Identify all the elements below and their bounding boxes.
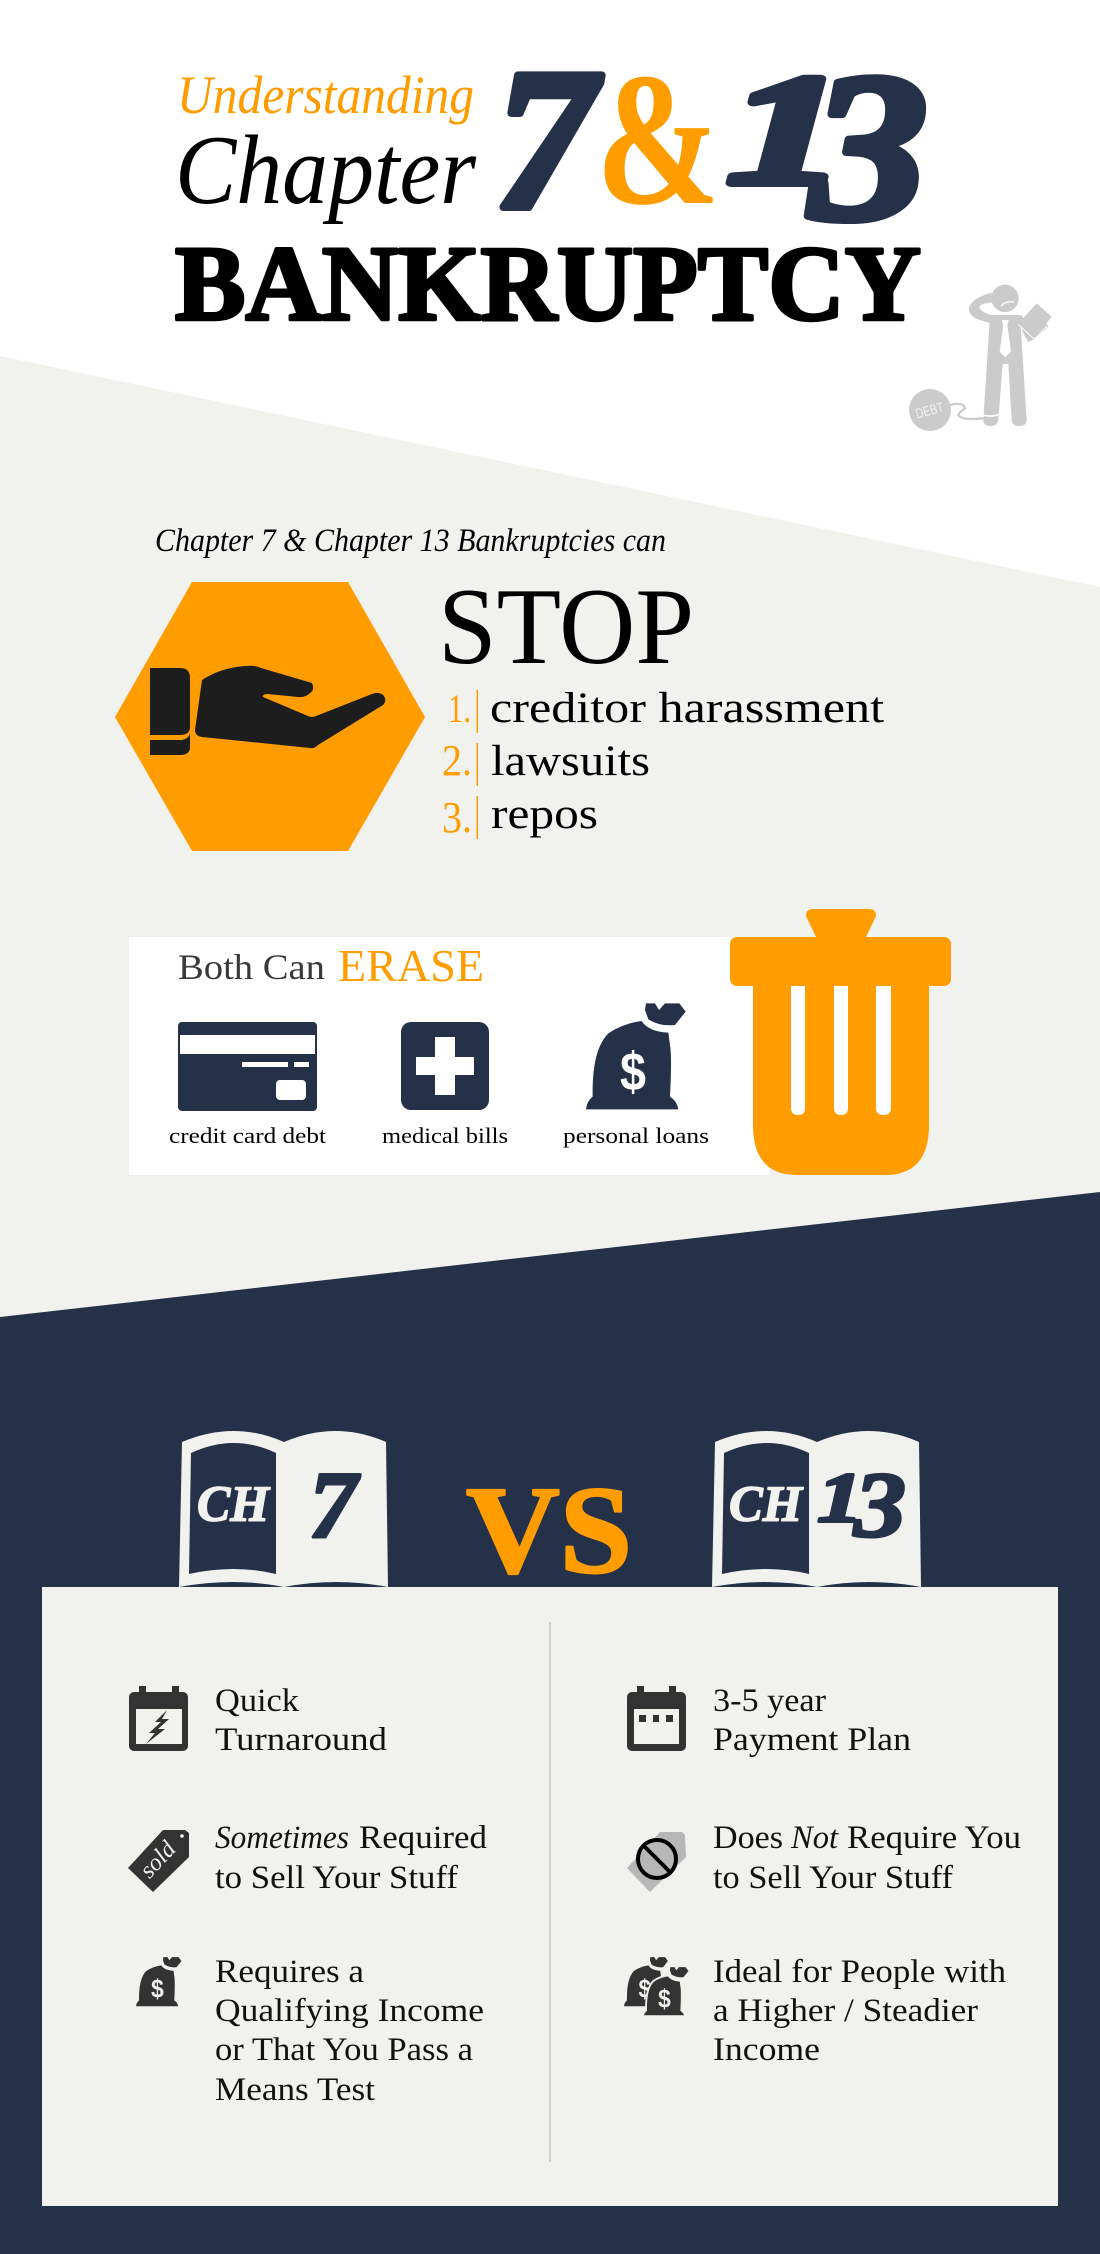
label: credit card debt: credit card debt	[169, 1123, 326, 1148]
text: requires qualifying income: Qualifying Income	[215, 1993, 484, 2029]
heading: both can erase	[178, 941, 484, 991]
text: 3-5 year payment plan: 3-5 year	[713, 1683, 826, 1719]
text: requires qualifying income	[215, 1954, 484, 2108]
text: does not require selling	[713, 1820, 1021, 1896]
text: 3-5 year payment plan	[713, 1683, 911, 1758]
title: 7	[495, 29, 602, 251]
icon: man chained to debt ball: DEBT	[914, 399, 946, 422]
text: ideal for higher income: a Higher / Steadier	[713, 1993, 978, 2029]
icon: sold tag	[128, 1830, 189, 1892]
icon: chapter 13 book	[712, 1431, 921, 1587]
icon: two money bags: $	[639, 1975, 651, 2003]
list: what bankruptcy stops: creditor harassment	[490, 685, 884, 732]
list: what bankruptcy stops: repos	[491, 791, 598, 838]
versus heading: VS	[466, 1462, 632, 1600]
title: 1	[726, 43, 847, 218]
text: requires qualifying income: Requires a	[215, 1954, 364, 1990]
icon: chapter 7 book: CH	[197, 1477, 270, 1533]
title: Chapter	[175, 116, 476, 225]
list: what bankruptcy stops	[442, 685, 884, 842]
icon: calendar with dots	[627, 1686, 686, 1751]
icon: chapter 7 book	[179, 1431, 388, 1587]
panel: both can erase	[129, 937, 769, 1175]
text: does not require selling: to Sell Your Stuff	[713, 1860, 953, 1896]
label: personal loans: personal loans	[563, 1123, 709, 1148]
list: what bankruptcy stops: 3.	[442, 793, 472, 842]
heading: both can erase: Both Can	[178, 947, 325, 987]
heading: both can erase: ERASE	[338, 941, 484, 991]
title: &	[596, 35, 720, 245]
icon: two money bags	[624, 1957, 688, 2016]
intro line: Chapter 7 & Chapter 13 Bankruptcies can	[155, 523, 666, 559]
icon: two money bags: $	[658, 1985, 671, 2013]
icon: sold tag: sold	[135, 1836, 182, 1883]
icon: man chained to debt ball	[909, 285, 1052, 431]
text: requires qualifying income: Means Test	[215, 2072, 375, 2108]
text: does not require selling: Require You	[847, 1820, 1021, 1856]
icon: credit card	[178, 1022, 317, 1111]
icon: orange hexagon with stop hand	[115, 582, 425, 851]
text: does not require selling: Does	[713, 1820, 783, 1856]
text: quick turnaround: Quick	[215, 1683, 300, 1719]
text: quick turnaround	[215, 1683, 388, 1758]
text: ideal for higher income	[713, 1954, 1007, 2068]
title: 3	[808, 30, 928, 264]
icon: calendar with lightning	[129, 1686, 188, 1751]
text: 3-5 year payment plan: Payment Plan	[713, 1722, 911, 1758]
list: what bankruptcy stops: 2.	[442, 736, 472, 785]
list: what bankruptcy stops: 1.	[448, 686, 471, 731]
icon: trash can	[730, 909, 951, 1175]
icon: medical cross	[401, 1022, 489, 1110]
title: Understanding	[177, 65, 474, 125]
heading: stop: STOP	[438, 566, 694, 687]
icon: chapter 7 book: 7	[309, 1452, 361, 1558]
text: ideal for higher income: Ideal for People with	[713, 1954, 1007, 1990]
list: what bankruptcy stops: lawsuits	[491, 738, 650, 785]
icon: small money bag	[136, 1957, 181, 2006]
text: quick turnaround: Turnaround	[215, 1722, 388, 1758]
title: BANKRUPTCY	[175, 226, 921, 344]
text: sometimes required to sell: Required	[359, 1820, 488, 1856]
text: sometimes required to sell	[215, 1820, 488, 1896]
icon: chapter 13 book: 3	[853, 1454, 906, 1557]
icon: money bag: $	[620, 1042, 646, 1102]
panel: comparison	[42, 1587, 1058, 2206]
text: sometimes required to sell: Sometimes	[215, 1820, 349, 1856]
text: does not require selling: Not	[790, 1820, 839, 1856]
text: ideal for higher income: Income	[713, 2032, 820, 2068]
icon: small money bag: $	[151, 1975, 164, 2003]
text: requires qualifying income: or That You Pass a	[215, 2032, 473, 2068]
icon: money bag	[586, 1003, 686, 1109]
title	[175, 29, 928, 344]
icon: chapter 13 book: 1	[817, 1460, 863, 1538]
icon: chapter 13 book: CH	[729, 1477, 803, 1533]
label: medical bills: medical bills	[382, 1123, 508, 1148]
text: sometimes required to sell: to Sell Your Stuff	[215, 1860, 458, 1896]
icon: crossed out tag	[627, 1832, 686, 1892]
